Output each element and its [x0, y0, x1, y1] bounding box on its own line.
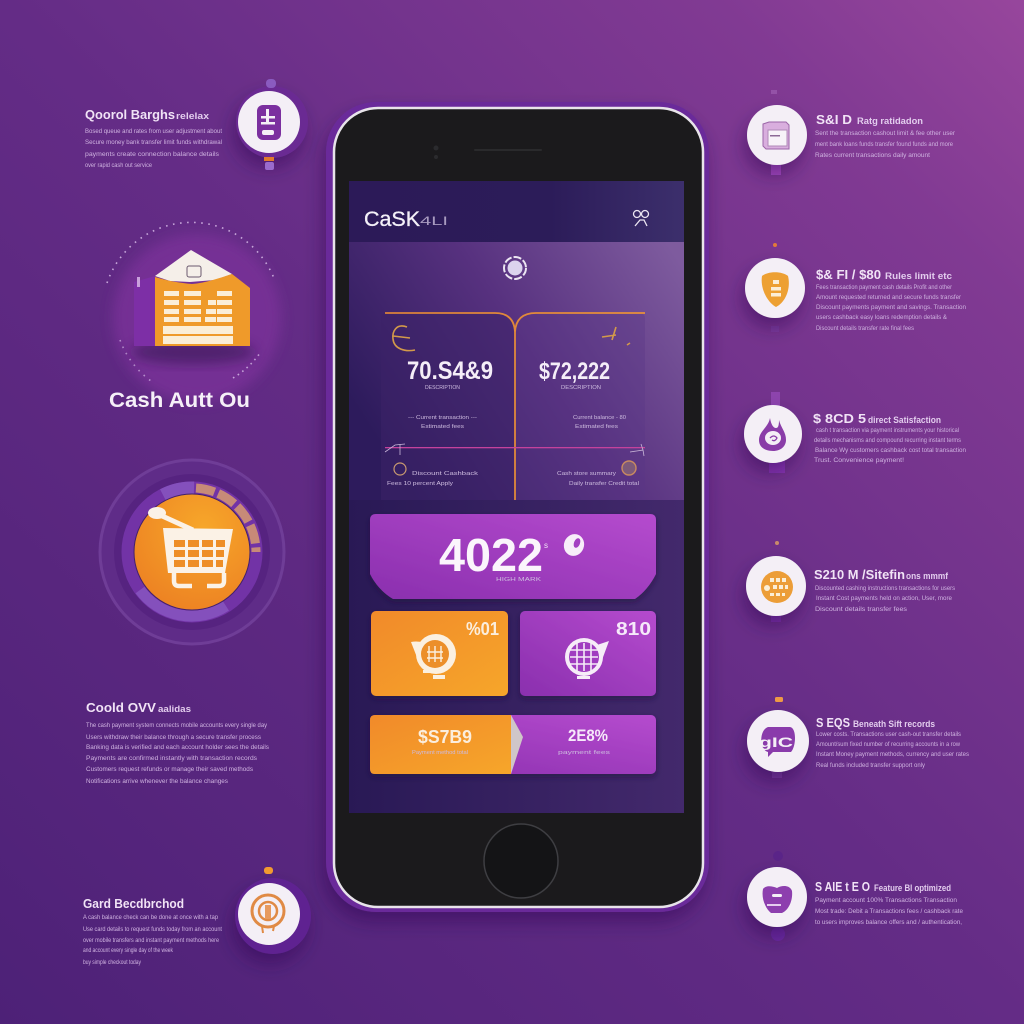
left balance card: Discount Cashback — [412, 471, 478, 477]
total card: HIGH MARK — [496, 577, 541, 583]
phone body — [334, 108, 703, 907]
text: S210 M /Sitefin — [814, 567, 905, 582]
text block: lower left: The cash payment system connects mobile accounts every single day — [86, 722, 268, 729]
text: $& FI / $80 — [816, 267, 881, 282]
text: Sent the transaction cashout limit & fee other user — [815, 130, 956, 137]
text: S AIE t E O — [815, 879, 870, 894]
text block: bottom left: A cash balance check can be done at once with a tap — [83, 914, 218, 921]
text block: top left: Bosed queue and rates from user adjustment about — [85, 128, 222, 135]
text: users cashback easy loans redemption details & — [816, 314, 948, 321]
text: S EQS — [816, 715, 850, 730]
text — [813, 411, 966, 464]
text: Amount requested returned and secure funds transfer — [816, 294, 962, 301]
text: Discount details transfer fees — [815, 606, 908, 613]
text block: top left: Qoorol Barghs — [85, 107, 175, 122]
text: Trust. Convenience payment! — [814, 457, 904, 464]
icon: chat badge: gIC — [759, 734, 793, 750]
orange divider — [385, 313, 645, 500]
item 1: right — [747, 90, 956, 175]
text: Rules limit etc — [885, 271, 952, 282]
text — [814, 567, 956, 613]
speaker and camera — [434, 146, 542, 159]
text — [816, 715, 970, 769]
text: Instant Money payment methods, currency and user rates — [816, 751, 970, 758]
heading: Cash Auth Out: Cash Autt Ou — [109, 389, 250, 412]
text: Payment account 100% Transactions Transaction — [815, 897, 957, 904]
total card — [370, 514, 656, 599]
text: Rates current transactions daily amount — [815, 152, 930, 159]
text: Ratg ratidadon — [857, 116, 923, 127]
text: Instant Cost payments held on action, User, more — [816, 595, 952, 602]
text block: top left: over rapid cash out service — [85, 162, 152, 169]
text: $ 8CD 5 — [813, 411, 866, 426]
right balance card: Estimated fees — [575, 424, 618, 430]
icon: envelope with ledger — [107, 222, 281, 402]
text block: lower left: Coold OVV — [86, 700, 156, 715]
pink rule — [385, 444, 645, 456]
split tile: 2E8% — [568, 726, 608, 745]
icon: drop badge — [744, 392, 802, 473]
icon: piggy globe orange — [411, 634, 456, 679]
text — [815, 112, 956, 159]
purple tile: 810 — [616, 619, 651, 639]
split tile: $S7B9 — [418, 727, 472, 747]
text block: top left: relelax — [176, 111, 210, 122]
item 5: right — [747, 697, 970, 778]
text block: lower left: Notifications arrive whenever the balance changes — [86, 778, 229, 785]
text block: bottom left — [83, 896, 222, 966]
text: details mechanisms and compound recurring instant terms — [814, 437, 962, 444]
screen — [349, 181, 684, 813]
text: Discount details transfer rate final fees — [816, 325, 915, 332]
text block: lower left: Users withdraw their balance through a secure transfer process — [86, 734, 262, 741]
text: Amount/sum fixed number of recurring accounts in a row — [816, 741, 960, 748]
item 2: right — [745, 243, 966, 332]
text block: bottom left: over mobile transfers and instant payment methods here — [83, 937, 219, 944]
purple tile — [520, 611, 656, 696]
text: ment bank loans funds transfer found funds and more — [815, 141, 953, 148]
icon: heart badge — [747, 851, 807, 941]
item 6: right — [747, 851, 963, 941]
icon: chat badge — [747, 697, 809, 778]
left balance card: 70.S4&9 — [407, 357, 493, 385]
icon: card glyph — [393, 326, 415, 351]
text: Discount payments payment and savings. Transaction — [816, 304, 966, 311]
text block: top left: payments create connection balance details — [85, 151, 220, 158]
icon: top left badge — [236, 79, 308, 170]
phone — [326, 102, 709, 912]
icon: bottom left badge — [235, 867, 311, 954]
item 3: right — [744, 392, 966, 473]
text block: bottom left: Gard Becdbrchod — [83, 896, 184, 911]
left balance card: --- Current transaction --- — [408, 415, 477, 421]
text: cash t transaction via payment instruments your historical — [816, 427, 959, 434]
left balance card — [381, 313, 515, 500]
icon: hero coin — [504, 257, 526, 279]
right balance card: Current balance - 80 — [573, 415, 626, 421]
right balance card — [516, 313, 645, 500]
right balance card: Cash store summary — [557, 471, 616, 477]
text block: lower left: Banking data is verified and each account holder sees the details — [86, 744, 270, 751]
text block: lower left — [86, 700, 270, 785]
orange tile — [371, 611, 508, 696]
icon: piggy globe purple — [565, 638, 609, 679]
text block: top left: Secure money bank transfer limit funds withdrawal — [85, 139, 223, 146]
right balance card: Daily transfer Credit total — [569, 481, 639, 487]
screen header: 4LI — [420, 214, 448, 228]
screen header — [349, 181, 684, 242]
screen hero panel — [349, 242, 684, 500]
text: to users improves balance offers and / authentication, — [815, 919, 962, 926]
text: Most trade: Debit a Transactions fees / cashback rate — [815, 908, 963, 915]
text: direct Satisfaction — [868, 415, 941, 426]
text block: lower left: Customers request refunds or manage their saved methods — [86, 766, 254, 773]
total card: s — [544, 541, 548, 550]
text: Fees transaction payment cash details Profit and other — [816, 284, 953, 291]
text block: lower left: Payments are confirmed instantly with transaction records — [86, 755, 258, 762]
orange tile: %01 — [466, 619, 499, 639]
text block: bottom left: buy simple checkout today — [83, 959, 142, 966]
icon: orange shield badge — [745, 243, 805, 332]
right balance card: DESCRIPTION — [561, 385, 601, 391]
text block: lower left: aalidas — [158, 704, 191, 715]
text — [815, 879, 963, 926]
text: Feature Bl optimized — [874, 883, 951, 894]
icon: shopping cart dial — [100, 460, 284, 644]
text: Beneath Sift records — [853, 719, 935, 730]
screen header: CaSK — [364, 208, 420, 231]
left balance card: DESCRIPTION — [425, 385, 460, 391]
text: Lower costs. Transactions user cash-out transfer details — [816, 731, 962, 738]
icon: card glyph — [602, 327, 630, 345]
text block: bottom left: Use card details to request funds today from an account — [83, 926, 222, 933]
left balance card: Fees 10 percent Apply — [387, 481, 453, 487]
icon: notebook badge — [747, 90, 807, 175]
icon: orange chip badge — [746, 541, 806, 622]
total card: 4022 — [439, 529, 543, 581]
item 4: right — [746, 541, 956, 622]
text: Discounted cashing instructions transactions for users — [815, 585, 956, 592]
text: ons mmmf — [906, 571, 949, 582]
left balance card: Estimated fees — [421, 424, 464, 430]
text: Real funds included transfer support only — [816, 762, 926, 769]
text: S&I D — [816, 112, 852, 127]
split tile: payment fees — [558, 750, 610, 756]
text block: top left — [85, 107, 223, 169]
text: Balance Wy customers cashback cost total transaction — [815, 447, 966, 454]
text — [816, 267, 966, 332]
home button — [484, 824, 558, 898]
split tile — [370, 715, 656, 774]
split tile: Payment method total — [412, 750, 468, 756]
text block: bottom left: and account every single day of the week — [83, 947, 174, 954]
right balance card: $72,222 — [539, 358, 610, 385]
